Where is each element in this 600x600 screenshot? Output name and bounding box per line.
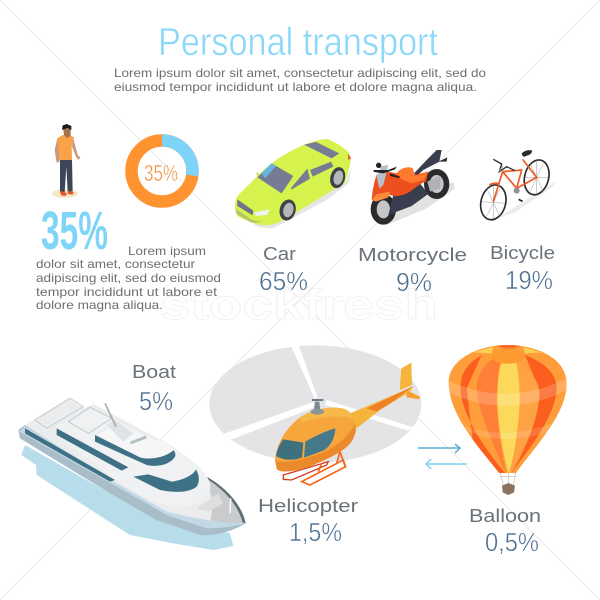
paragraph: tempor incididunt ut labore et (36, 285, 218, 299)
paragraph: adipiscing elit, sed do eiusmod (36, 271, 221, 285)
motorcycle label: Motorcycle (358, 245, 467, 265)
helicopter label: 1,5% (289, 517, 342, 547)
helicopter label: Helicopter (258, 496, 358, 516)
paragraph: Lorem ipsum (128, 244, 206, 258)
intro text (114, 66, 486, 94)
paragraph: dolore magna aliqua. (36, 298, 163, 312)
bicycle label: 19% (505, 265, 553, 295)
icon: boat (18, 398, 246, 550)
watermark: stockfresh (160, 281, 438, 328)
motorcycle label: 9% (396, 267, 432, 297)
big 35 percent: 35% (41, 201, 108, 261)
balloon label: 0,5% (485, 527, 539, 557)
car label: Car (263, 244, 296, 264)
car label (259, 244, 308, 296)
icon: balloon (448, 345, 567, 495)
balloon label: Balloon (469, 506, 541, 526)
arrows (418, 444, 467, 469)
icon: helicopter (209, 345, 421, 485)
icon: bicycle (477, 150, 555, 222)
helicopter label (258, 496, 358, 547)
balloon label (469, 506, 541, 557)
intro text: Lorem ipsum dolor sit amet, consectetur adipiscing elit, sed do (114, 66, 486, 80)
bicycle label (490, 243, 555, 295)
icon: motorcycle (371, 150, 455, 225)
paragraph (36, 244, 221, 312)
boat label: 5% (139, 386, 173, 416)
donut chart 35%: 35% (144, 160, 178, 186)
car label: 65% (259, 266, 308, 296)
paragraph: dolor sit amet, consectetur (36, 257, 195, 271)
motorcycle label (358, 245, 467, 297)
icon: car (235, 139, 352, 228)
bicycle label: Bicycle (490, 243, 555, 263)
title: Personal transport (158, 21, 438, 64)
boat label (132, 362, 176, 416)
donut chart 35% (132, 140, 193, 202)
icon: person (52, 124, 80, 198)
boat label: Boat (132, 362, 176, 382)
intro text: eiusmod tempor incididunt ut labore et dolore magna aliqua. (114, 80, 477, 94)
